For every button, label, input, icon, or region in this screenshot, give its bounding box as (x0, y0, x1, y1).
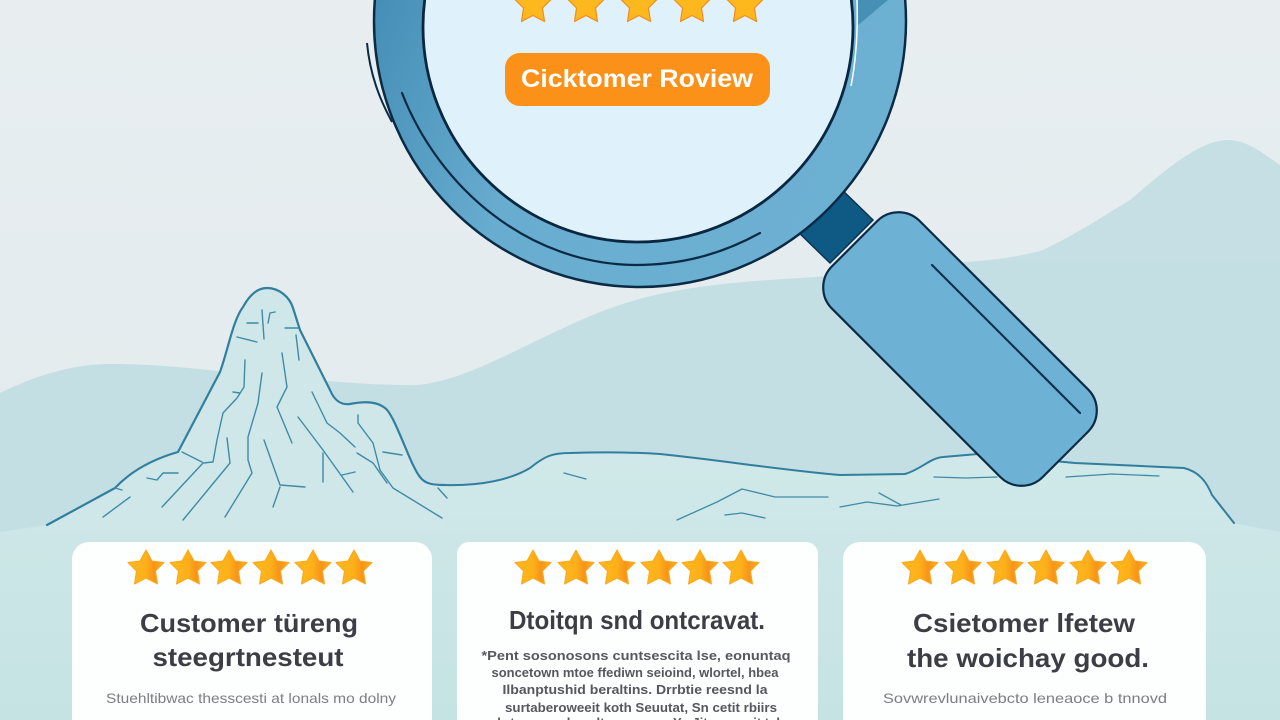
handle highlight line (932, 265, 1080, 413)
card 3 heading (907, 608, 1149, 673)
card 2 text: surtaberoweeit koth Seuutat, Sn cetit rbiirs (505, 700, 777, 715)
badge: customer review: Cicktomer Roview (521, 65, 754, 93)
magnifier handle (811, 200, 1109, 498)
top stars (515, 0, 763, 22)
magnifier ring (374, 0, 906, 287)
mountain cracks (103, 310, 447, 520)
ground cracks (564, 473, 1159, 520)
badge: customer review (505, 53, 770, 106)
card 1 heading: steegrtnesteut (152, 642, 344, 672)
card 1 stars (128, 550, 372, 584)
card 2 text: Ilbanptushid beraltins. Drrbtie reesnd la (502, 682, 768, 697)
card 2 text (482, 648, 791, 720)
ring outer edge highlight (367, 43, 392, 122)
card 2 text: soncetown mtoe ffediwn seioind, wlortel, hbea (492, 665, 779, 680)
card 3 (843, 542, 1206, 720)
card 2 heading: Dtoitqn snd ontcravat. (509, 605, 765, 635)
back hill right (900, 140, 1280, 720)
mountain outline (47, 288, 445, 525)
ring top-right shade (857, 0, 888, 26)
card 1 heading (140, 608, 358, 672)
magnifier neck (792, 183, 873, 263)
lens (423, 0, 853, 242)
foreground ground (0, 452, 1280, 720)
card 3 stars (902, 550, 1147, 584)
mountain (47, 288, 447, 530)
lens edge sliver (851, 0, 857, 86)
ring inner arc (402, 93, 760, 265)
card 1 text: Stuehltibwac thesscesti at lonals mo dolny (106, 690, 396, 706)
card 2 stars (515, 550, 759, 584)
magnifying glass (367, 0, 1109, 498)
card 3 text: Sovwrevlunaivebcto leneaoce b tnnovd (883, 690, 1167, 706)
horizon line (445, 452, 1234, 523)
card 2 text: *Pent sosonosons cuntsescita lse, eonuntaq (482, 648, 791, 663)
mid hill (0, 262, 1280, 720)
card 1 (72, 542, 432, 720)
card 2 (457, 542, 818, 720)
card 3 heading: Csietomer lfetew (913, 608, 1136, 638)
card 3 heading: the woichay good. (907, 643, 1149, 673)
card 1 heading: Customer türeng (140, 608, 358, 638)
